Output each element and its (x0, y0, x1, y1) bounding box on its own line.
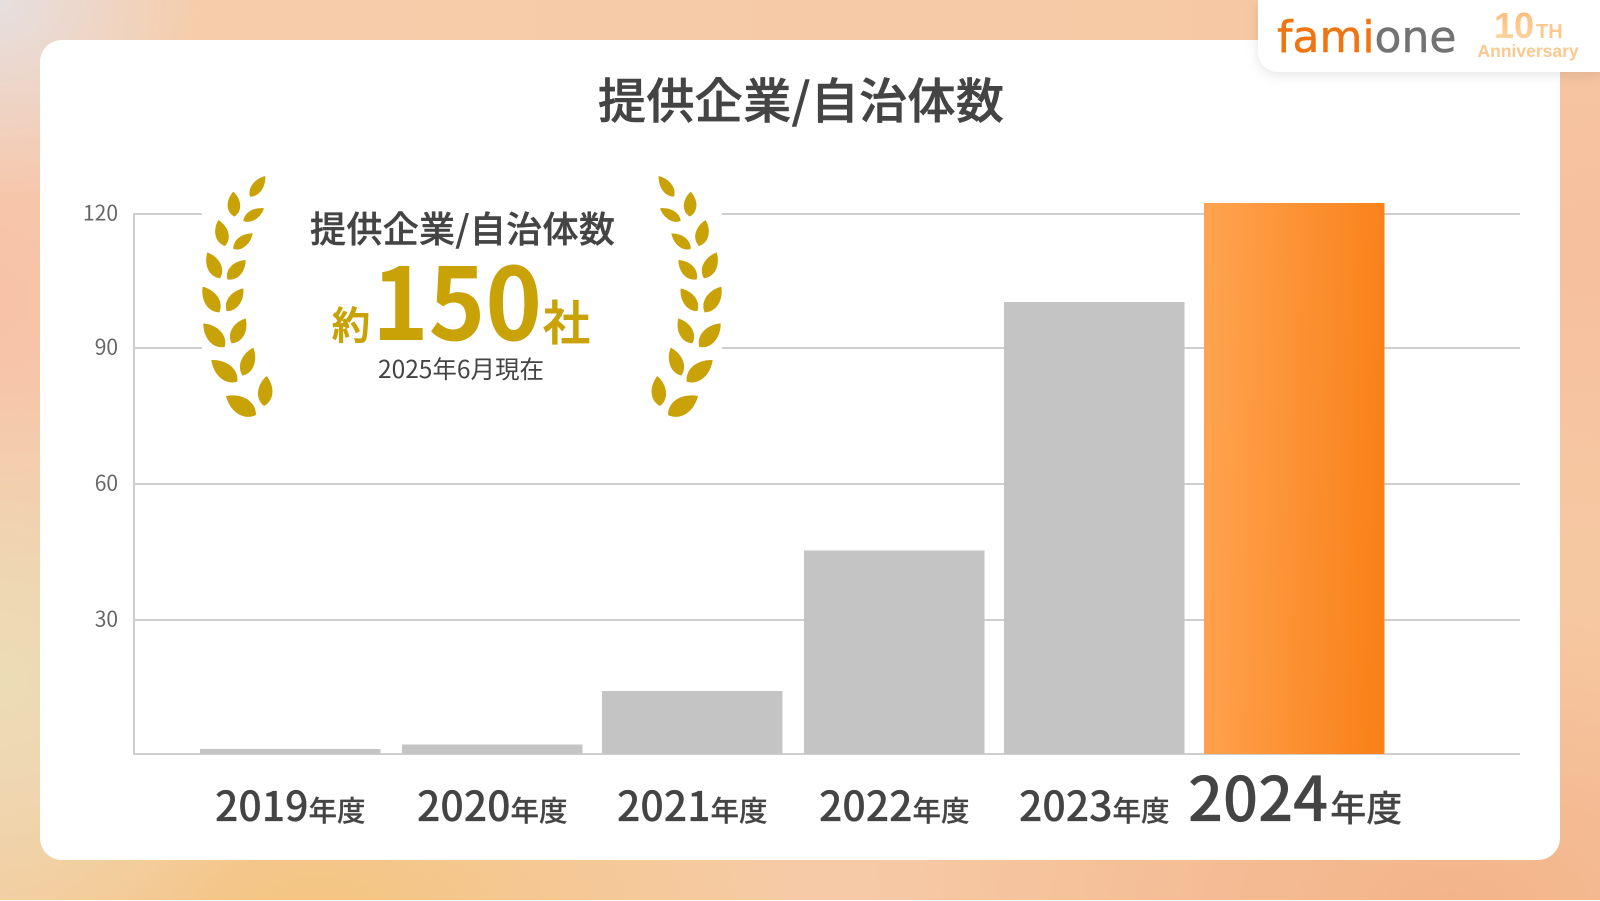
badge: 10th anniversary: 10 (1494, 5, 1534, 46)
y axis labels: 90 (95, 332, 118, 362)
logo card (1258, 0, 1600, 72)
x axis labels (215, 750, 1402, 839)
grid lines and axes (134, 213, 1520, 755)
callout date: 2025年6月現在 (378, 351, 544, 386)
y axis labels (83, 198, 118, 634)
callout heading: 提供企業/自治体数 (310, 201, 615, 253)
x axis labels: 2020年度 (417, 773, 568, 833)
callout value: 社 (543, 285, 590, 354)
bar 2020 (402, 744, 582, 754)
x axis labels: 2024年度 (1188, 750, 1402, 839)
bar 2024 (1204, 203, 1384, 754)
x axis labels: 2023年度 (1019, 773, 1170, 833)
laurel wreath right (650, 173, 727, 422)
bar chart (83, 198, 1520, 839)
bar 2022 (804, 550, 984, 754)
logo: famione: famione (1277, 12, 1456, 63)
title: 提供企業/自治体数 (598, 62, 1004, 132)
badge: 10th anniversary: Anniversary (1478, 41, 1579, 61)
y axis labels: 30 (95, 604, 118, 634)
callout: approx 150 companies (310, 201, 615, 386)
y axis labels: 120 (83, 198, 118, 228)
y axis labels: 60 (95, 468, 118, 498)
bar 2023 (1004, 302, 1184, 754)
callout value: 約 (332, 295, 370, 350)
bar 2019 (200, 749, 380, 754)
bar 2021 (602, 691, 782, 754)
badge: 10th anniversary (1478, 5, 1579, 61)
laurel wreath left (197, 173, 274, 422)
x axis labels: 2022年度 (819, 773, 970, 833)
x axis labels: 2021年度 (617, 773, 768, 833)
callout value (332, 224, 590, 369)
badge: 10th anniversary: TH (1536, 21, 1563, 43)
callout value: 150 (372, 224, 542, 369)
x axis labels: 2019年度 (215, 773, 366, 833)
